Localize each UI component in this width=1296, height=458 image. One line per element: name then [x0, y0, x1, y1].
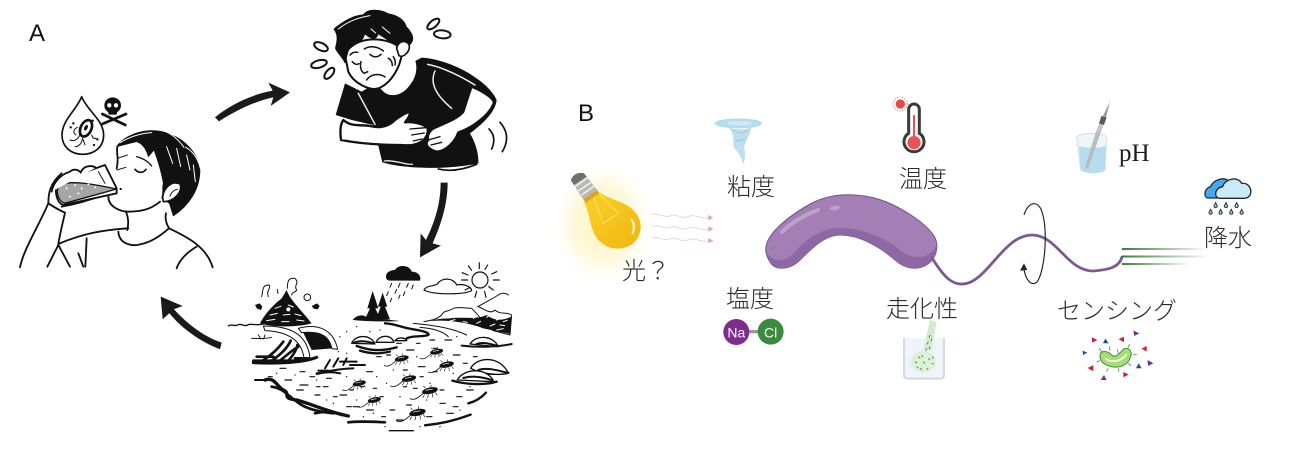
ear [397, 42, 409, 56]
label: sensing: センシング [1057, 298, 1177, 325]
shirt hem [384, 161, 412, 164]
green bacterium [1100, 348, 1131, 367]
bulb screw base [571, 173, 597, 201]
grass tufts [252, 335, 365, 373]
outline cloud [424, 279, 472, 294]
waste pile [255, 278, 320, 326]
bulb filament [593, 193, 618, 223]
far river bend lines [413, 323, 467, 337]
neck [378, 55, 416, 95]
lower hem and motion marks [438, 122, 507, 170]
sun [462, 263, 499, 297]
green motion lines [1122, 248, 1209, 265]
probe [1085, 132, 1101, 168]
label: salinity: 塩度 [726, 286, 774, 313]
sick boy's hair [333, 10, 413, 64]
icon: chemotaxis dish [904, 320, 944, 379]
icon: contaminated water drop [62, 97, 104, 154]
label: precipitation: 降水 [1204, 225, 1252, 252]
arrow: drinking to illness [215, 83, 290, 121]
flagellum rotation arrow [1020, 204, 1045, 284]
rocks [352, 336, 508, 382]
pine trees [353, 291, 400, 321]
arrow: river to drinking [161, 297, 222, 349]
storm cloud and rain [386, 266, 420, 302]
boy's hair [117, 131, 200, 216]
beaker body [1077, 133, 1107, 173]
sweat drops [310, 17, 451, 81]
label: light: 光？ [622, 258, 670, 285]
icon: sensing bacterium with signal molecules [1083, 331, 1153, 380]
red sun [896, 99, 905, 109]
sick boy's face [345, 39, 402, 89]
icon: rain cloud [1205, 179, 1251, 214]
signal molecules [1083, 331, 1153, 380]
illustration: sick boy holding stomach [310, 10, 507, 170]
label: pH: pH [1119, 140, 1150, 167]
icon: skull and crossbones [102, 97, 126, 125]
icon: beaker with pH probe [1077, 102, 1110, 173]
bacterium flagellum [932, 235, 1122, 284]
icon: NaCl: Cl [764, 324, 777, 340]
bulb highlight [632, 220, 634, 233]
mercury [907, 115, 921, 149]
far hills and bushes [424, 293, 512, 335]
panel label A: A [29, 20, 45, 47]
hair highlights [338, 16, 390, 33]
panel label B: B [578, 100, 594, 127]
bacterium body [766, 195, 937, 268]
bulb glow [553, 162, 653, 285]
screw threads [575, 177, 594, 195]
river bank swooshes [253, 323, 512, 431]
label: temperature: 温度 [899, 166, 947, 193]
label: chemotaxis: 走化性 [886, 296, 958, 323]
water ripples [268, 340, 477, 420]
rock shading [354, 341, 507, 380]
beaker liquid [1079, 146, 1106, 173]
icon: light bulb [553, 162, 713, 285]
icon: NaCl: Na [727, 324, 745, 340]
boy's face and body outline [20, 147, 213, 268]
bulb cap [571, 173, 587, 185]
arrow: illness to river [420, 183, 448, 257]
thermometer tube [904, 104, 924, 152]
icon: thermometer [893, 97, 924, 152]
panel A: infection cycle [20, 10, 512, 431]
arms and hands [340, 87, 494, 152]
illustration: polluted river scene [228, 263, 512, 431]
facial expression [350, 47, 395, 80]
bulb collar [583, 190, 599, 203]
label: viscosity: 粘度 [727, 174, 775, 201]
panel B: bacterium environmental sensing [553, 97, 1252, 380]
water speckles [277, 327, 470, 427]
icon: viscosity tornado [715, 118, 762, 165]
bacteria in water [343, 347, 454, 422]
black shirt [336, 58, 497, 168]
shirt highlights [358, 64, 475, 124]
illustration: boy drinking contaminated water [20, 97, 213, 268]
light waves [652, 214, 713, 243]
glass of water and hand [52, 165, 117, 205]
icon: NaCl [723, 319, 784, 345]
bulb glass [584, 192, 641, 249]
drainage pipes [228, 324, 338, 358]
